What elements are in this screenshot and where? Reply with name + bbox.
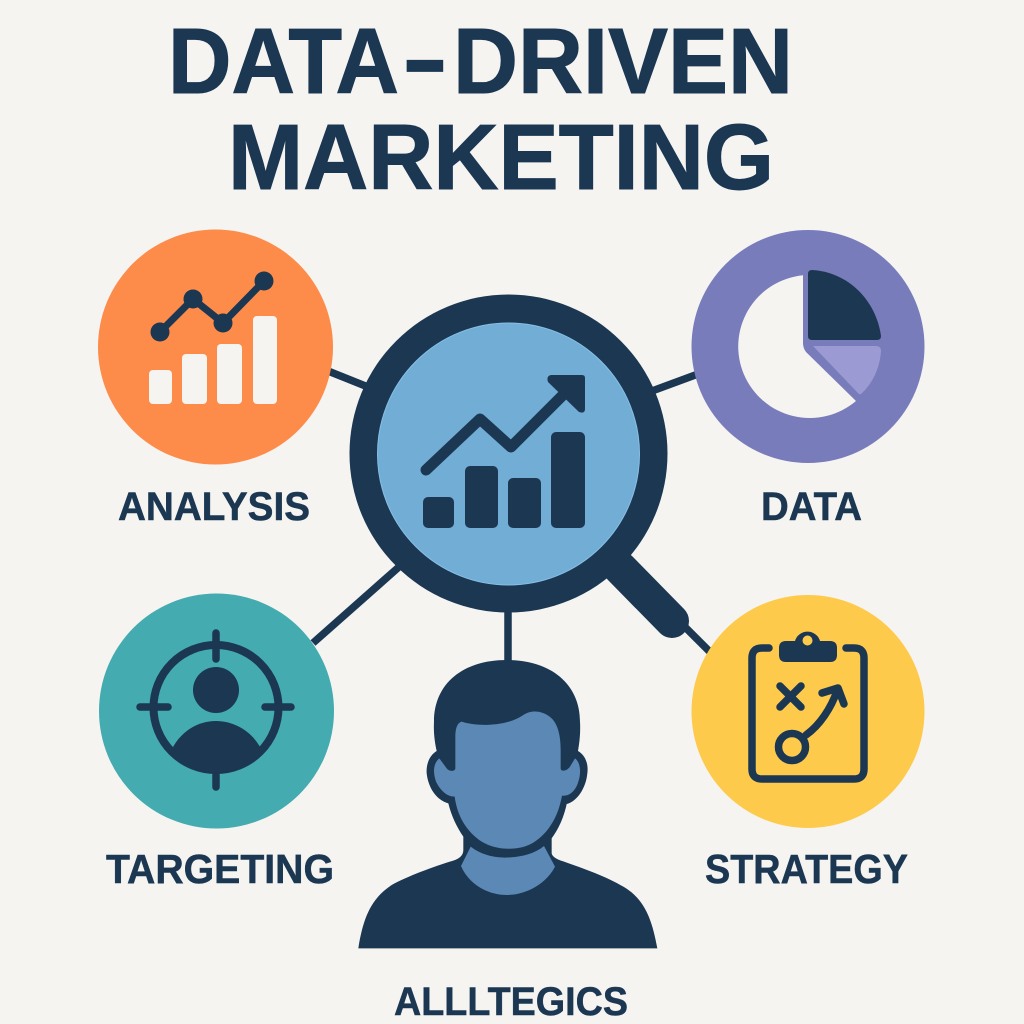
label: alltegics: ALLLTEGICS — [394, 980, 628, 1024]
title: DRIVEN — [453, 9, 793, 113]
label: strategy: STRATEGY — [705, 846, 908, 892]
magnifier handle — [620, 568, 672, 621]
icon: target person — [140, 633, 291, 787]
title — [168, 6, 793, 209]
panel: targeting — [99, 594, 334, 828]
label: analysis: ANALYSIS — [118, 485, 310, 529]
panel: analysis — [98, 230, 333, 464]
icon: pie chart — [738, 270, 881, 418]
title: MARKETING — [228, 105, 774, 209]
magnifying glass — [350, 294, 672, 621]
panel: strategy — [692, 595, 924, 828]
person silhouette — [358, 660, 657, 948]
title: - — [402, 6, 448, 110]
title: DATA — [168, 9, 399, 113]
icon: analysis line chart — [150, 272, 274, 342]
icon: growth chart — [423, 375, 585, 528]
icon: analysis bars — [149, 316, 277, 404]
label: data: DATA — [761, 485, 862, 529]
label: targeting: TARGETING — [106, 846, 334, 892]
icon: clipboard — [752, 632, 864, 779]
connector lines — [313, 371, 710, 664]
panel: data — [692, 230, 924, 463]
